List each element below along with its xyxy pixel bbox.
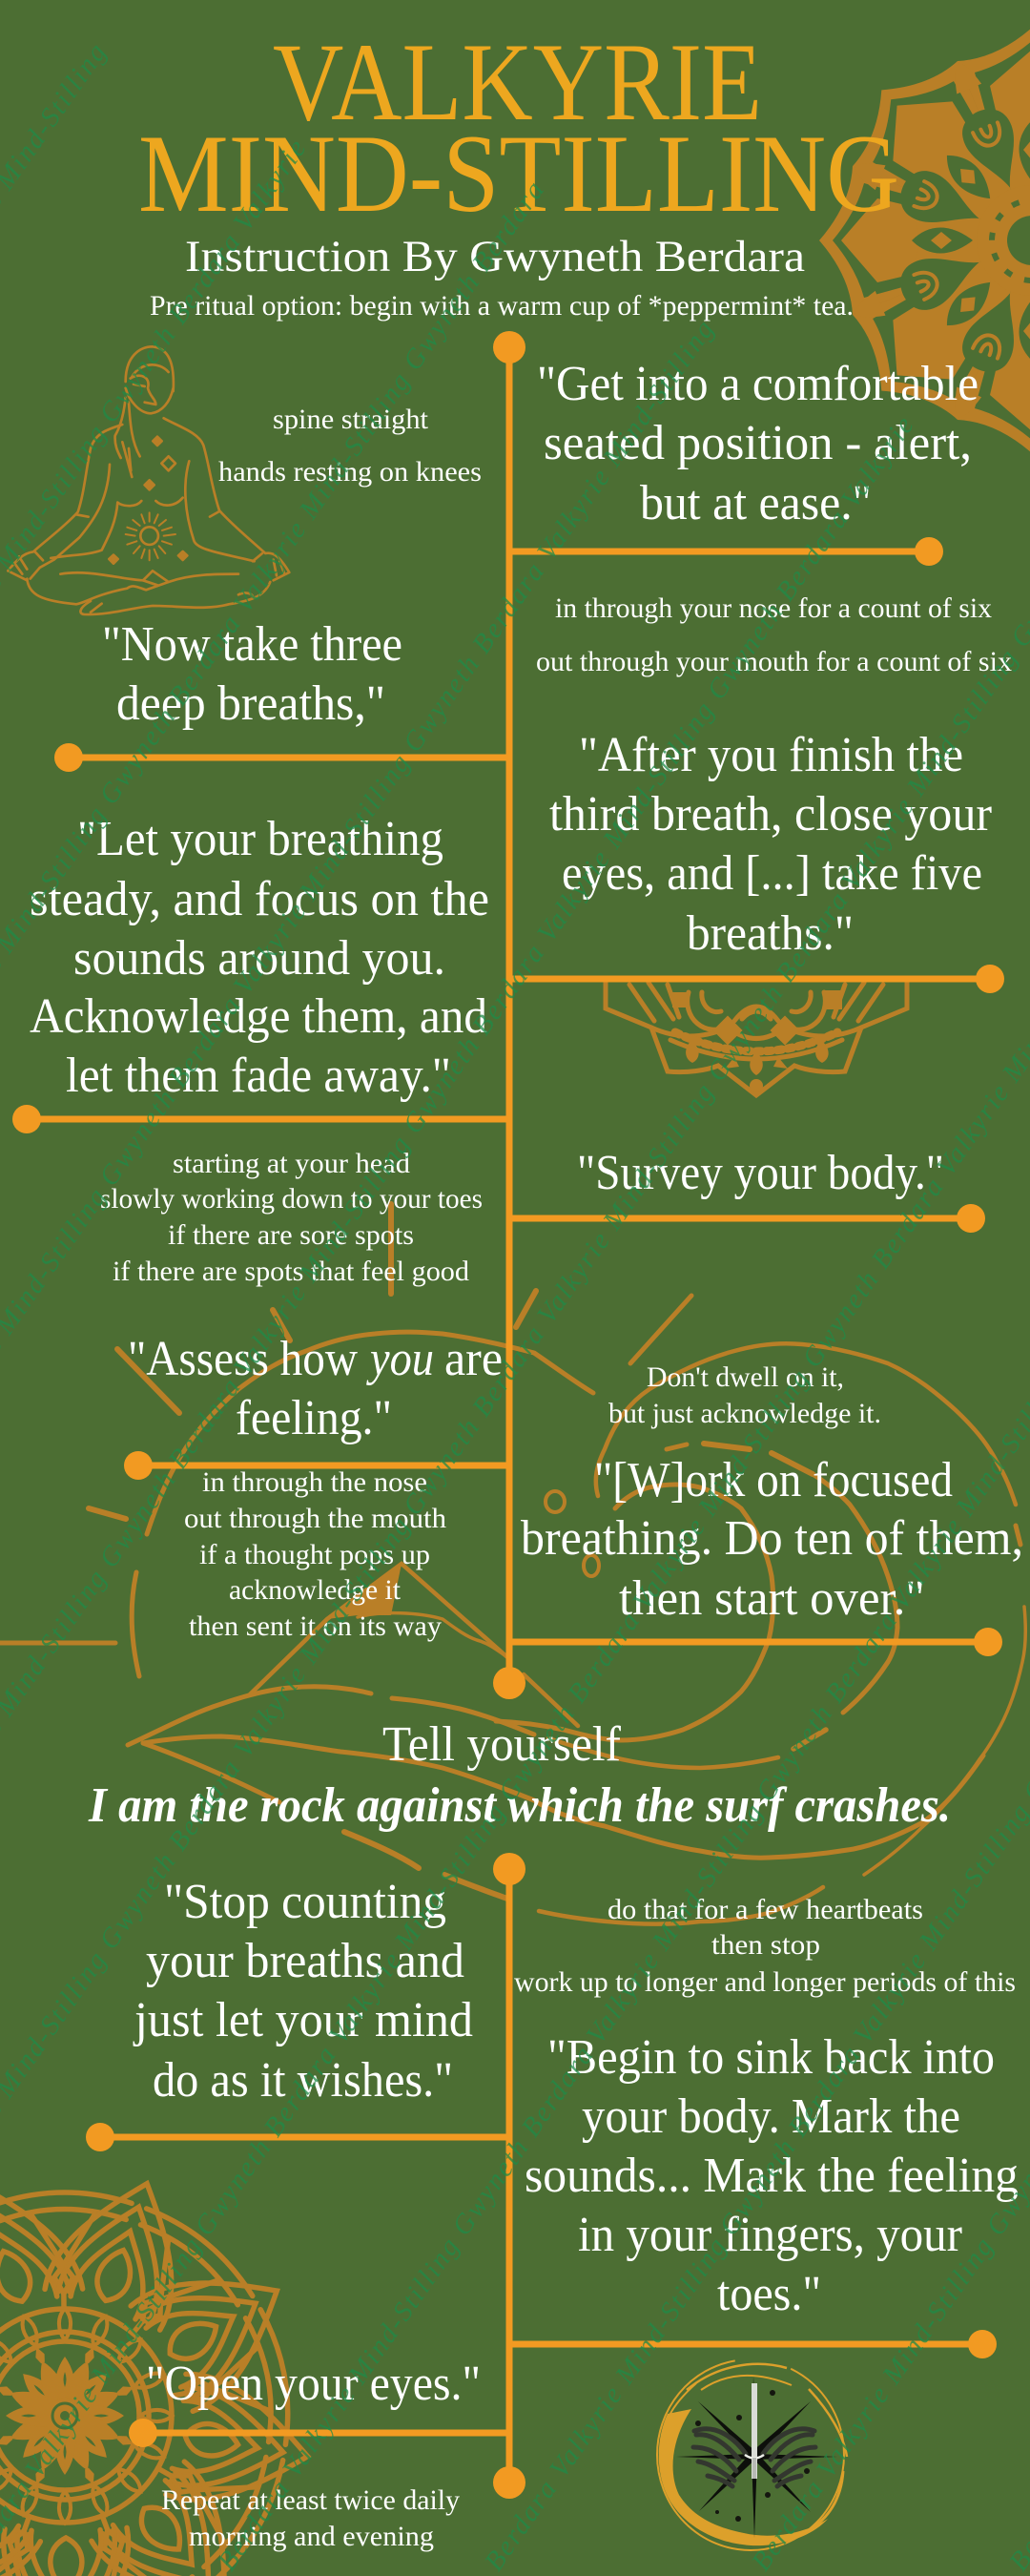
quote: comfortable seated position: but at ease." (640, 476, 872, 530)
note: heartbeats (514, 1894, 1016, 1998)
branch: three deep breaths (54, 743, 509, 772)
branch: stop counting (86, 2123, 509, 2151)
note: body scan: if there are sore spots (168, 1219, 414, 1251)
quote: three deep breaths (102, 617, 402, 731)
branch: open your eyes (129, 2419, 509, 2447)
quote: three deep breaths: deep breaths," (116, 676, 385, 731)
note: body scan: slowly working down to your toes (100, 1183, 483, 1215)
quote: sink back into body: your body. Mark the (582, 2089, 960, 2144)
quote: focused breathing: breathing. Do ten of them, (521, 1511, 1023, 1566)
mandala: half ornament under breath branch (606, 981, 907, 1095)
title: VALKYRIE (273, 21, 762, 144)
mantra (88, 1717, 951, 1833)
note: body scan (100, 1148, 483, 1287)
quote: open your eyes: "Open your eyes." (146, 2357, 481, 2411)
note: repeat daily (161, 2484, 460, 2552)
quote: sink back into body: toes." (717, 2267, 821, 2321)
note: posture (218, 404, 482, 488)
title: MIND-STILLING (138, 113, 899, 236)
quote: survey your body: "Survey your body." (577, 1146, 944, 1200)
note: breathing and thoughts: acknowledge it (229, 1574, 402, 1606)
quote: after the third breath: breaths." (687, 906, 854, 961)
quote: focused breathing: "[W]ork on focused (594, 1453, 953, 1507)
note: breath counts (536, 592, 1012, 677)
branch: five breaths (509, 965, 1004, 993)
branch: assess feeling (124, 1451, 509, 1480)
mandala: top right (819, 28, 1030, 453)
quote: stop counting: your breaths and (146, 1934, 464, 1988)
note: do not dwell (608, 1361, 881, 1429)
quote: focused breathing: then start over." (619, 1571, 925, 1626)
quote: stop counting (133, 1875, 473, 2108)
quote: let your breathing steady: Acknowledge them, and (30, 989, 487, 1044)
timeline: central trunk, upper segment (493, 331, 525, 1699)
quote: sink back into body (525, 2030, 1019, 2321)
note: breath counts: in through your nose for a count of six (555, 592, 992, 624)
quote: sink back into body: in your fingers, your (578, 2208, 962, 2262)
quote: let your breathing steady (30, 812, 489, 1103)
note: do not dwell: Don't dwell on it, (647, 1361, 844, 1393)
quote: sink back into body: sounds... Mark the feeling (525, 2149, 1019, 2203)
illustration: meditating figure (8, 346, 289, 614)
quote: comfortable seated position: "Get into a comfortable (537, 357, 978, 411)
mantra: I am the rock against which the surf crashes. (88, 1778, 951, 1833)
note: breathing and thoughts (184, 1466, 446, 1642)
pre ritual note: Pre ritual option: begin with a warm cup of *peppermint* tea. (150, 290, 854, 322)
quote: assess how you are feeling: are (444, 1332, 503, 1386)
quote: three deep breaths: "Now take three (102, 617, 402, 672)
note: repeat daily: Repeat at least twice daily (161, 2484, 460, 2516)
note: breathing and thoughts: then sent it on its way (189, 1610, 442, 1642)
quote: comfortable seated position: seated position - alert, (544, 416, 972, 470)
branch: sink back into body (509, 2330, 997, 2358)
note: breathing and thoughts: in through the nose (202, 1466, 427, 1498)
timeline: central trunk, lower segment (493, 1853, 525, 2499)
note: heartbeats: then stop (711, 1929, 820, 1961)
note: body scan: if there are spots that feel good (113, 1256, 469, 1287)
quote: after the third breath (549, 728, 992, 961)
branch: survey your body (509, 1204, 985, 1233)
branch: let breathing steady (12, 1105, 509, 1133)
quote: sink back into body: "Begin to sink back into (547, 2030, 995, 2085)
quote: after the third breath: eyes, and [...] take five (562, 846, 982, 901)
note: posture: hands resting on knees (218, 456, 482, 488)
quote: let your breathing steady: steady, and focus on the (30, 872, 489, 926)
quote: stop counting: "Stop counting (164, 1875, 446, 1929)
title (138, 21, 899, 236)
branch: focused breathing (509, 1628, 1002, 1656)
mandala: bottom left (0, 2136, 348, 2576)
quote: let your breathing steady: let them fade away." (66, 1049, 451, 1103)
note: breathing and thoughts: if a thought pops up (199, 1539, 430, 1570)
note: posture: spine straight (273, 404, 429, 435)
note: breath counts: out through your mouth for a count of six (536, 646, 1012, 677)
quote: assess how you are feeling: you (366, 1332, 434, 1386)
logo: sword compass emblem (657, 2359, 847, 2550)
quote: stop counting: just let your mind (133, 1993, 473, 2047)
quote: stop counting: do as it wishes." (153, 2053, 453, 2108)
quote: after the third breath: "After you finish the (579, 728, 963, 782)
quote: comfortable seated position (537, 357, 978, 530)
quote: let your breathing steady: "Let your breathing (77, 812, 443, 866)
quote: assess how you are feeling: "Assess how (128, 1332, 358, 1386)
quote: after the third breath: third breath, close your (549, 787, 992, 841)
note: heartbeats: do that for a few heartbeats (608, 1894, 923, 1925)
note: heartbeats: work up to longer and longer periods of this (514, 1966, 1016, 1998)
mantra: Tell yourself (382, 1717, 622, 1772)
note: breathing and thoughts: out through the mouth (184, 1503, 446, 1534)
illustration: sun, spiral and wave brush drawing (0, 1204, 1025, 1924)
subtitle: Instruction By Gwyneth Berdara (185, 232, 805, 281)
quote: focused breathing (521, 1453, 1023, 1626)
note: do not dwell: but just acknowledge it. (608, 1398, 881, 1429)
branch: get into position (509, 537, 943, 566)
quote: assess how you are feeling (128, 1332, 503, 1445)
note: repeat daily: morning and evening (189, 2521, 434, 2552)
quote: assess how you are feeling: feeling." (236, 1391, 392, 1445)
note: body scan: starting at your head (173, 1148, 410, 1179)
quote: let your breathing steady: sounds around you. (73, 931, 445, 986)
